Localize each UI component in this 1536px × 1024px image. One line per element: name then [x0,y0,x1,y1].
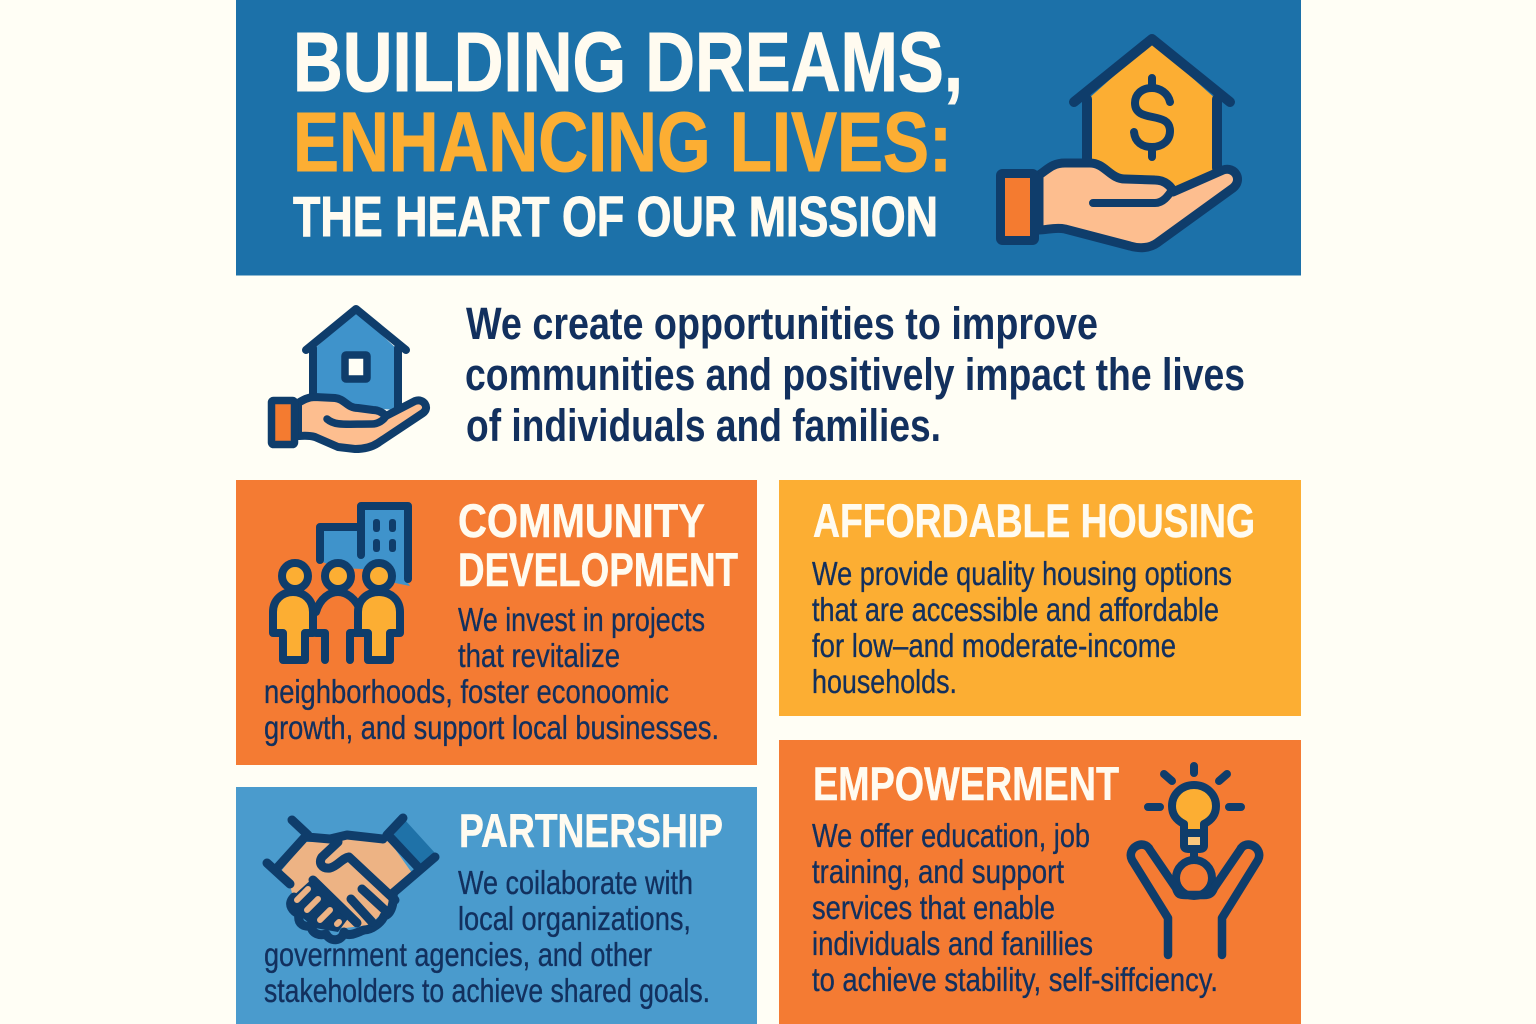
body text: community development [264,601,719,746]
intro text: We create opportunities to improve [466,298,1098,349]
body text: partnership: We coilaborate with [458,864,693,901]
body text: community development: neighborhoods, foster econoomic [264,673,669,710]
body text: partnership: stakeholders to achieve shared goals. [264,972,710,1009]
body text: partnership: government agencies, and other [264,936,652,973]
body text: affordable housing: for low–and moderate-income [812,627,1176,664]
icon: people and buildings [273,506,410,660]
panel: empowerment [779,740,1301,1024]
heading: community development [458,494,738,596]
icon: handshake [267,818,435,940]
body text: empowerment [812,817,1218,998]
body text: community development: growth, and support local businesses. [264,709,719,746]
body text: community development: We invest in projects [458,601,705,638]
heading: community development: DEVELOPMENT [458,543,738,596]
heading: partnership: PARTNERSHIP [459,804,723,857]
panel: community development [236,480,757,765]
body text: partnership: local organizations, [458,900,691,937]
intro text: communities and positively impact the lives [465,349,1245,400]
title [293,15,963,249]
body text: empowerment: services that enable [812,889,1055,926]
heading: community development: COMMUNITY [458,494,705,547]
body text: empowerment: We offer education, job [812,817,1090,854]
body text: affordable housing: households. [812,663,957,700]
title: THE HEART OF OUR MISSION [293,185,938,249]
body text: community development: that revitalize [458,637,620,674]
panel: affordable housing [779,480,1301,716]
body text: partnership [264,864,710,1009]
icon: person with lightbulb [1131,766,1259,955]
body text: empowerment: individuals and fanillies [812,925,1093,962]
body text: empowerment: to achieve stability, self-siffciency. [812,961,1218,998]
icon: hand holding blue house [272,309,426,449]
intro text [465,298,1245,451]
heading: empowerment: EMPOWERMENT [813,757,1119,810]
icon: hand holding house with dollar sign [1000,39,1238,248]
body text: empowerment: training, and support [812,853,1064,890]
intro text: of individuals and families. [466,400,941,451]
body text: affordable housing: We provide quality housing options [812,555,1232,592]
heading: affordable housing: AFFORDABLE HOUSING [813,494,1255,547]
title: BUILDING DREAMS, [293,15,963,109]
panel: partnership [236,787,757,1024]
title: ENHANCING LIVES: [293,95,952,189]
panel: header banner [236,0,1301,276]
body text: affordable housing: that are accessible and affordable [812,591,1219,628]
body text: affordable housing [812,555,1232,700]
